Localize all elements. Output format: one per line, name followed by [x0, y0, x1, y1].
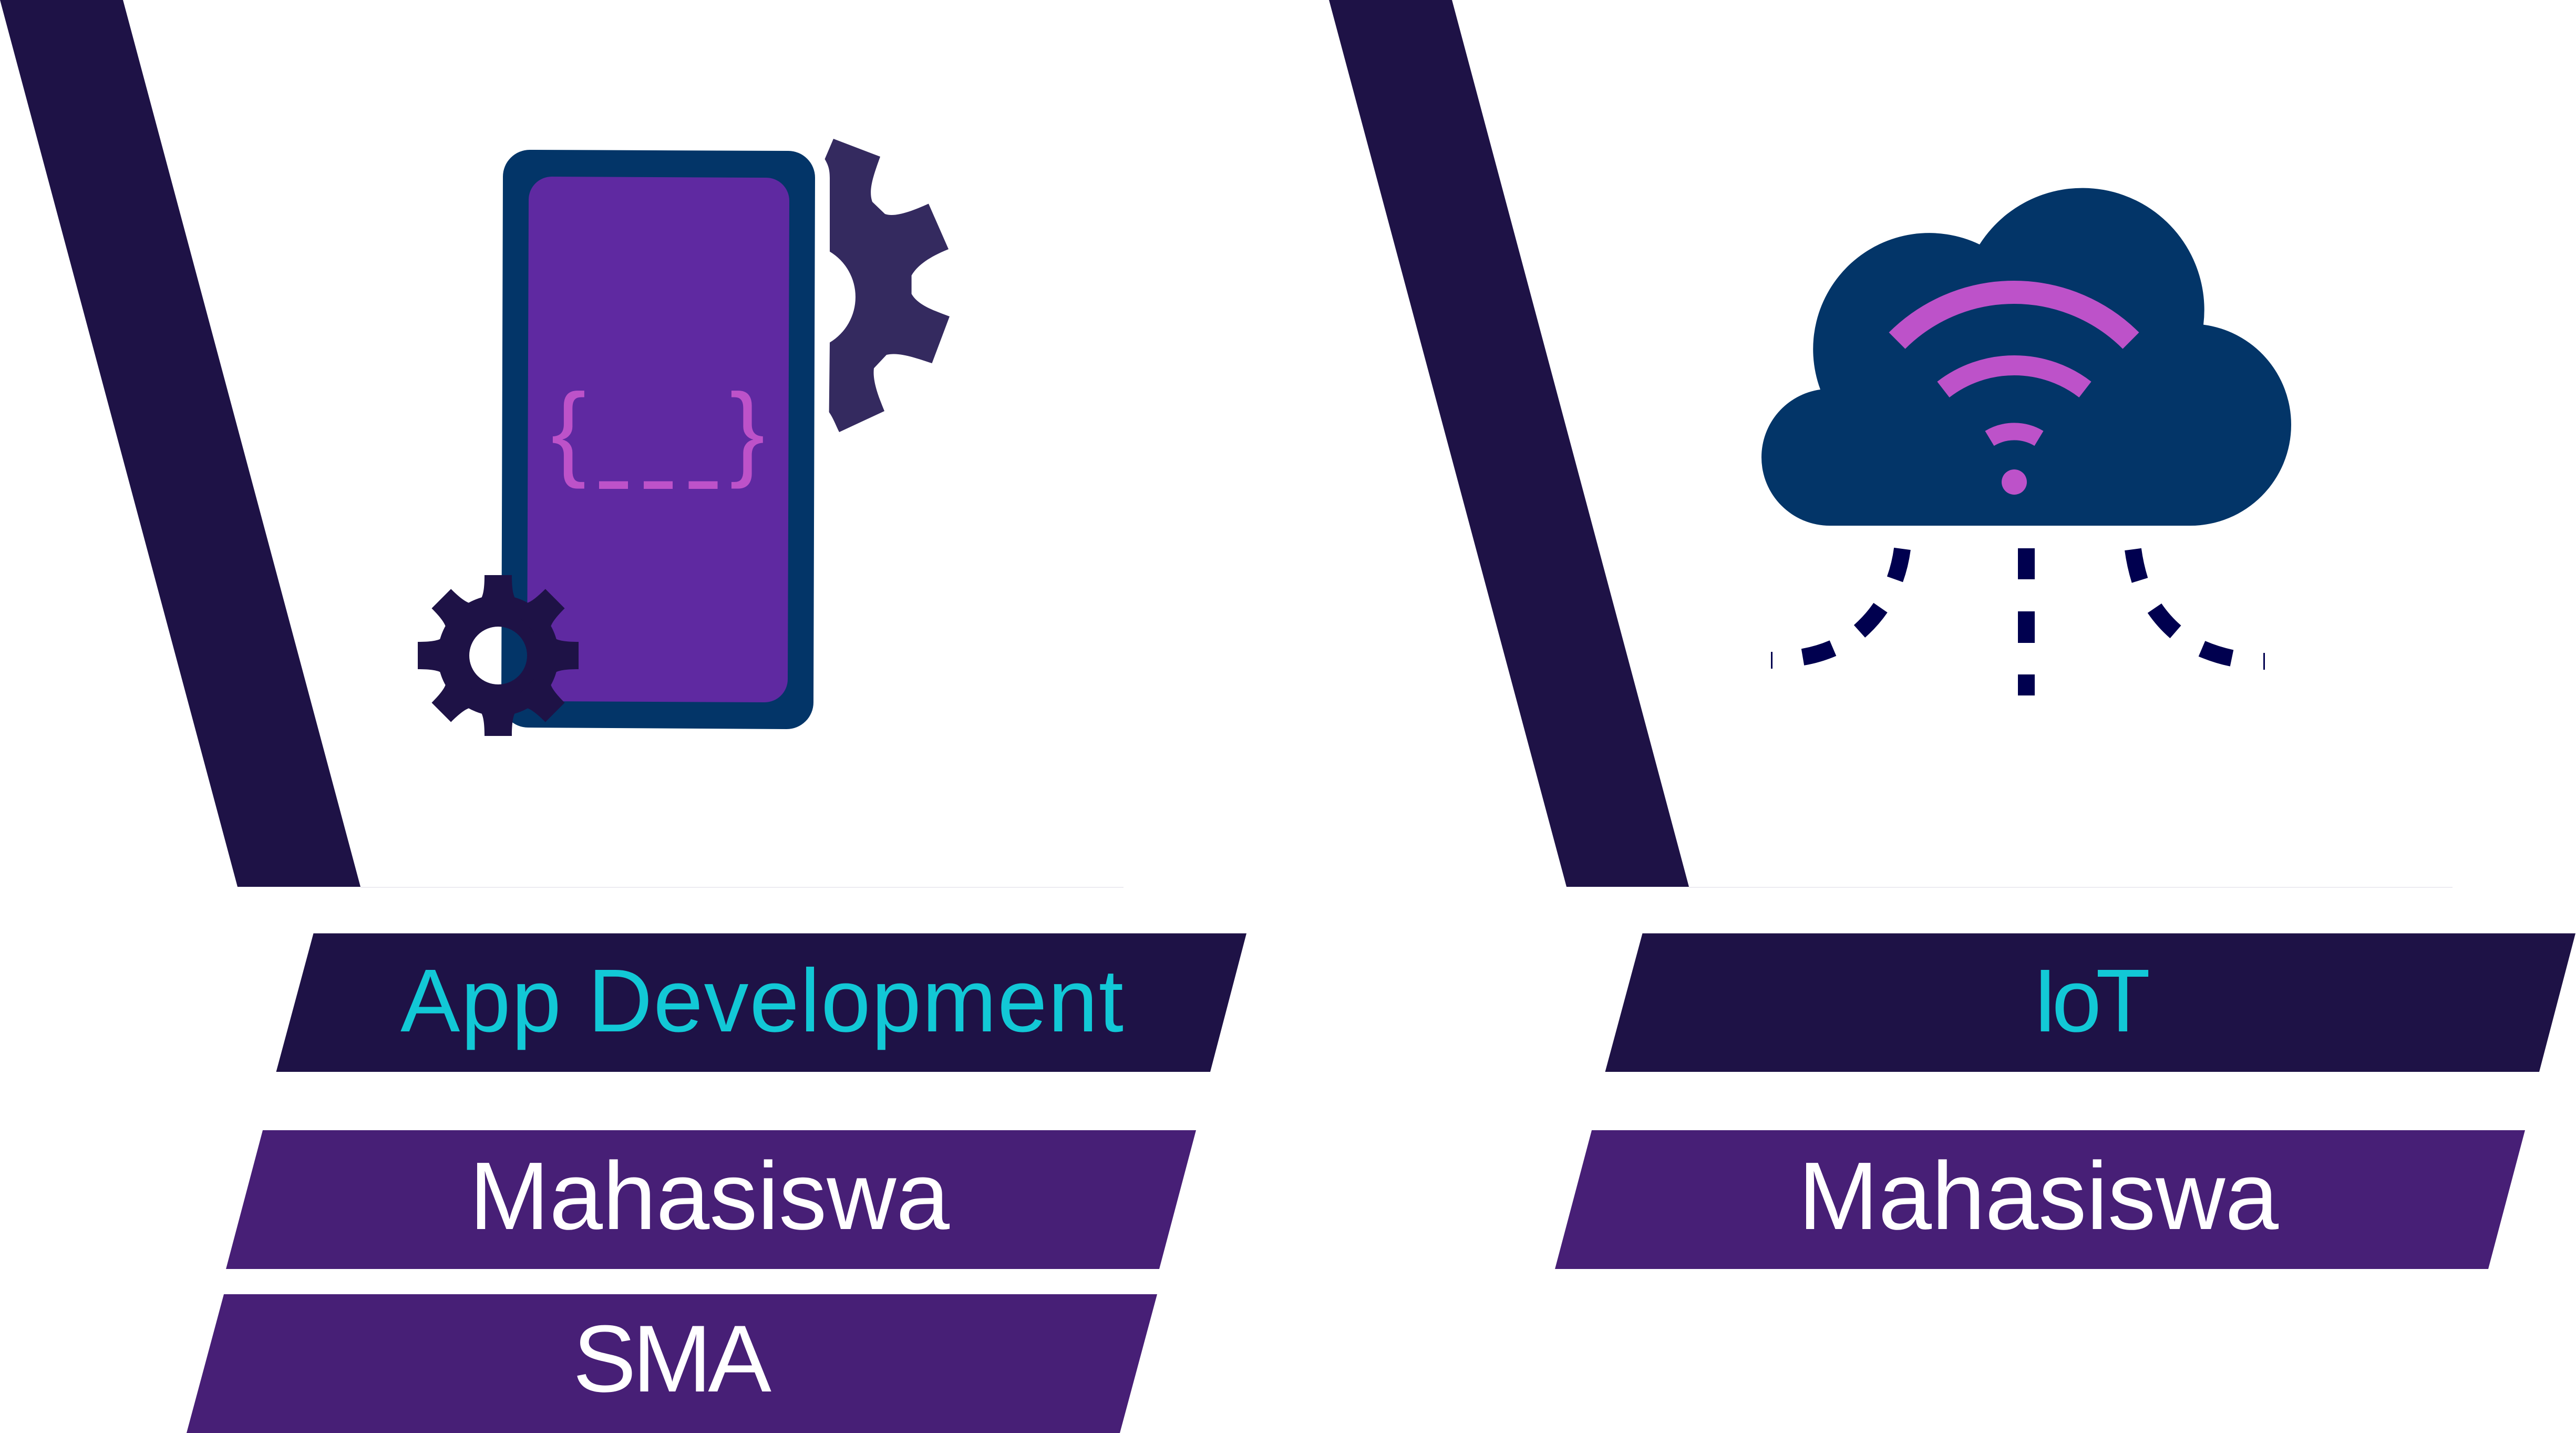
panel: App Development — [0, 0, 1246, 1433]
label: SMA — [187, 1294, 1157, 1433]
icon: right gear behind phone — [825, 139, 950, 432]
heading: App Development — [276, 934, 1246, 1072]
panel: IoT — [1329, 0, 2575, 1269]
heading: App Development: App Development — [400, 951, 1124, 1051]
icon: small gear — [418, 575, 579, 736]
cloud — [1761, 188, 2291, 526]
icon: cloud with wifi — [1761, 188, 2291, 526]
label: Mahasiswa: Mahasiswa — [1798, 1142, 2279, 1250]
icon: dashed connection lines — [1771, 548, 2265, 695]
diagonal stripe right — [1329, 0, 1689, 887]
wifi symbol — [1897, 292, 2131, 495]
label: Mahasiswa — [226, 1130, 1196, 1269]
label: SMA: SMA — [573, 1306, 771, 1412]
label: Mahasiswa: Mahasiswa — [469, 1142, 950, 1250]
label: Mahasiswa — [1555, 1130, 2525, 1269]
phone screen — [527, 177, 789, 702]
code brace right: } — [730, 372, 765, 489]
heading: IoT — [1605, 934, 2575, 1072]
code underscores — [599, 482, 718, 489]
diagonal stripe left — [0, 0, 360, 887]
code brace left: { — [551, 372, 586, 489]
icon: phone — [501, 150, 815, 729]
heading: IoT: IoT — [2033, 951, 2150, 1051]
phone body — [501, 150, 815, 729]
